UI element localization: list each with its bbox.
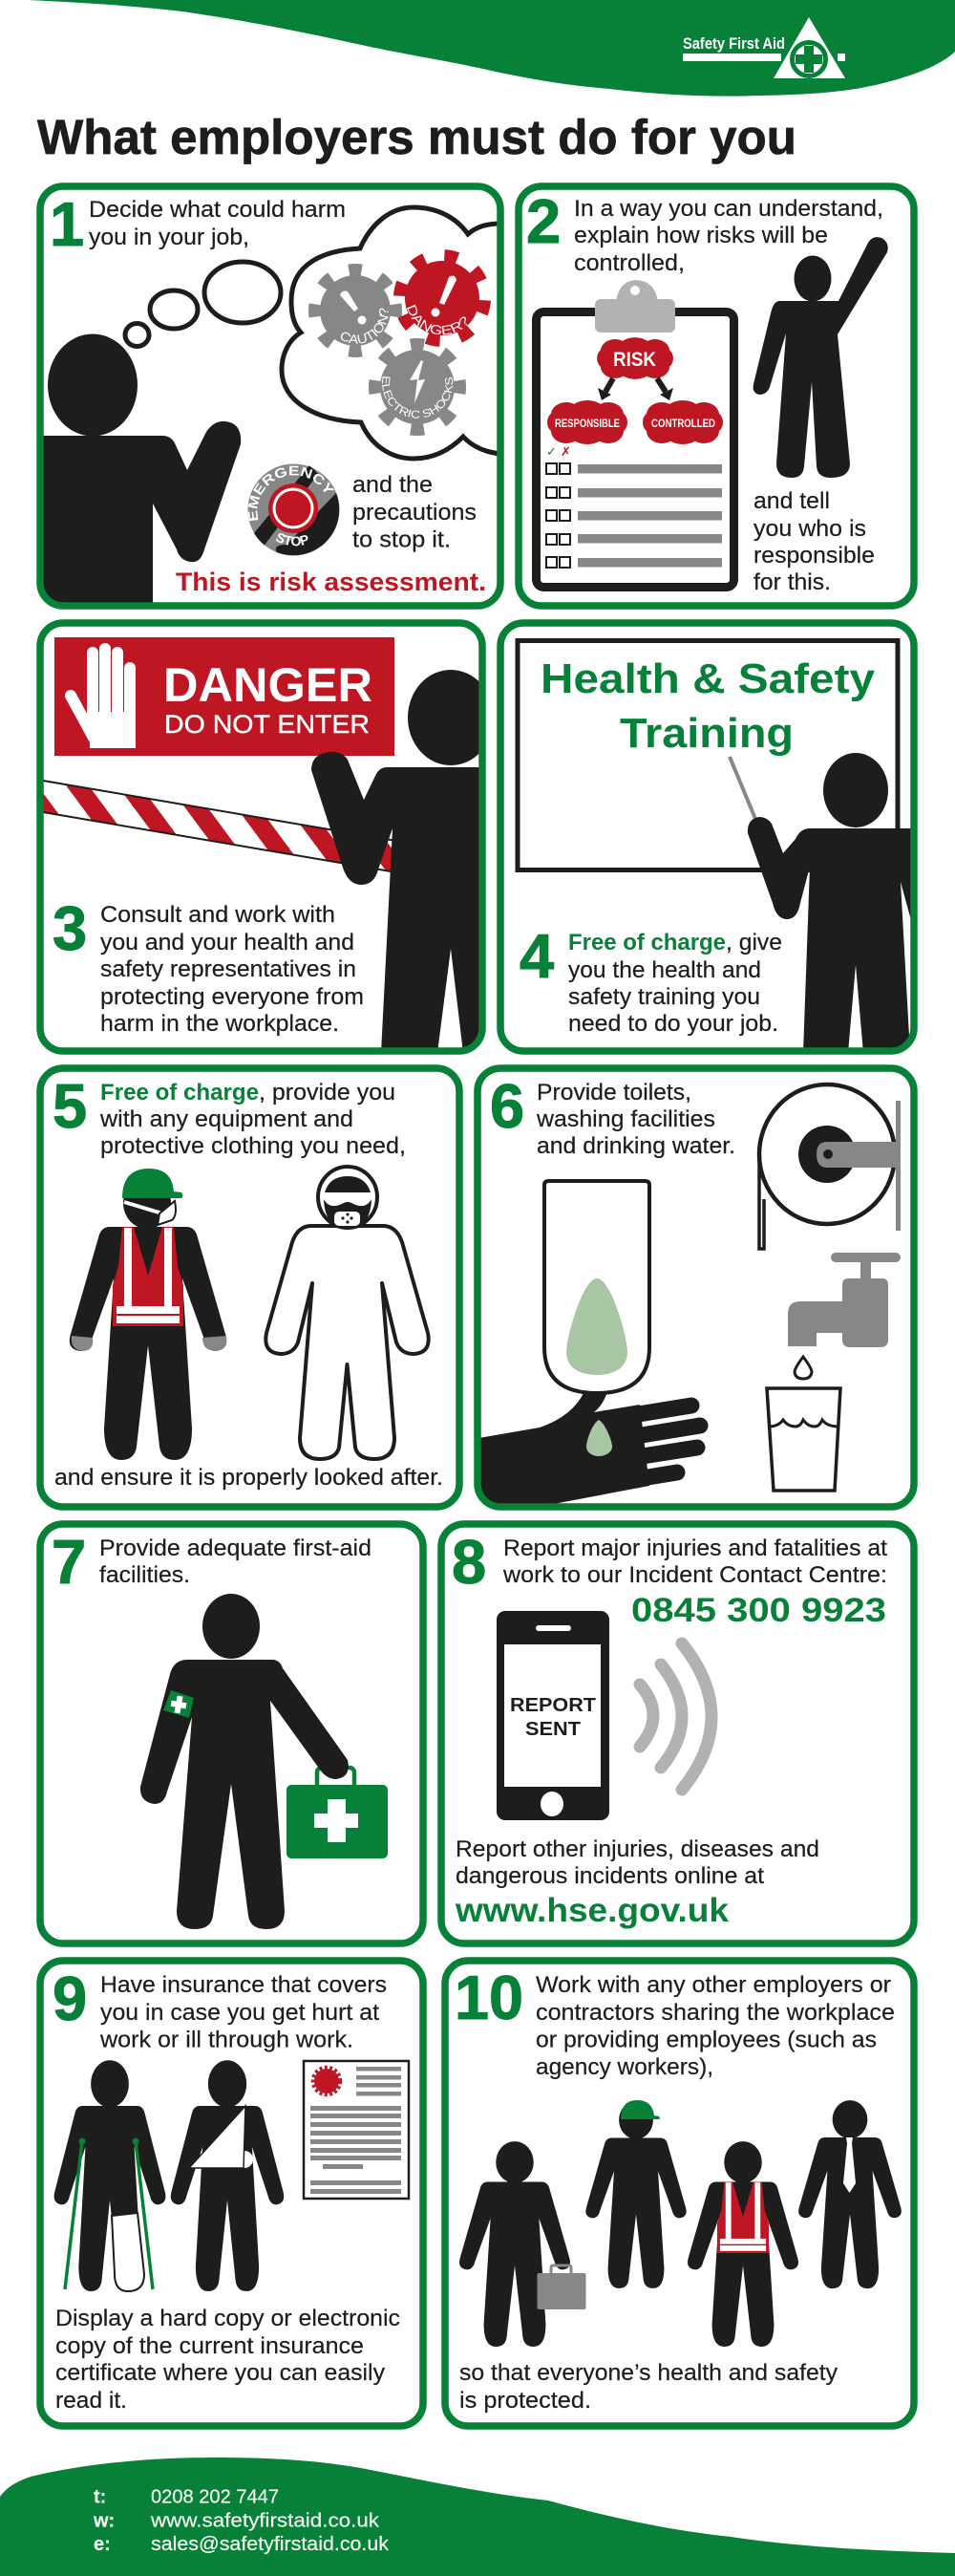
text: consult and work with: Consult and work with [100, 902, 335, 928]
text: provide adequate first-aid [99, 1535, 371, 1588]
footer contact details: w: [93, 2511, 115, 2532]
clipboard: ✗ [561, 445, 571, 460]
icon: toilet roll [759, 1084, 901, 1249]
icon: tap [788, 1253, 901, 1347]
figure: person on crutches [54, 2060, 165, 2291]
text: in a way you can understand: explain how risks will be [574, 223, 828, 248]
text: and ensure it is properly looked after: and ensure it is properly looked after. [54, 1465, 443, 1491]
danger sign: DANGER [163, 658, 372, 712]
figure: person with raised hand [311, 670, 494, 1053]
figure: person in protective suit [265, 1167, 429, 1459]
number 4: 4 [520, 921, 554, 991]
header: green wave band [29, 0, 955, 97]
text: have insurance: you in case you get hurt at [100, 2000, 379, 2026]
text: display a hard copy: copy of the current insurance [55, 2333, 364, 2359]
text: free of charge equipment: Free of charge [100, 1080, 259, 1106]
figure: person with hi-vis vest [688, 2141, 798, 2347]
text: and tell you who is responsible: for this. [753, 569, 831, 595]
panel 5: protective clothing [40, 1068, 459, 1507]
text: in a way you can understand: controlled, [574, 250, 685, 276]
text: and the precautions [352, 472, 477, 552]
text: and tell you who is responsible: you who is [753, 516, 866, 542]
text: consult and work with: protecting everyone from [100, 984, 364, 1010]
website: www.hse.gov.uk [455, 1892, 730, 1929]
armband [163, 1690, 194, 1718]
figure: person raising arm [753, 237, 888, 478]
thought bubbles [125, 262, 281, 346]
text: free of charge equipment [99, 1080, 406, 1159]
text: this is risk assessment: This is risk assessment. [176, 568, 486, 596]
text: and the precautions: to stop it. [352, 527, 451, 552]
text: so that everyone's health: so that everyone’s health and safety [459, 2360, 838, 2386]
icon: hand under soap dispenser [474, 1181, 700, 1510]
text: consult and work with [100, 902, 364, 1037]
number 5: 5 [53, 1071, 87, 1141]
gear: electric shocks [369, 338, 466, 436]
text: report major injuries: Report major injuries and fatalities at [503, 1535, 887, 1561]
icon: insurance certificate [304, 2061, 409, 2199]
footer contact details: sales@safetyfirstaid.co.uk [151, 2534, 390, 2555]
text: provide adequate first-aid: Provide adequate first-aid [99, 1535, 371, 1561]
thought cloud [282, 207, 502, 459]
number 6: 6 [490, 1071, 524, 1141]
text: in a way you can understand: In a way you can understand, [574, 196, 883, 222]
text: decide what could harm: Decide what could harm [89, 197, 346, 223]
text: report major injuries [502, 1535, 887, 1588]
text: free of charge training [568, 930, 782, 1037]
panel 1: risk assessment [36, 182, 504, 610]
number 10: 10 [455, 1963, 523, 2032]
panel 4: training [500, 623, 917, 1053]
text: provide adequate first-aid: facilities. [99, 1562, 190, 1588]
clipboard: ✓ [546, 445, 557, 460]
icon: signal waves [640, 1643, 711, 1790]
text: so that everyone's health [459, 2360, 838, 2414]
icon: phone: SENT [525, 1719, 581, 1740]
clipboard: RESPONSIBLE [555, 419, 620, 430]
icon: first aid kit [286, 1768, 388, 1858]
number 7: 7 [52, 1527, 86, 1597]
text: and the precautions: and the [352, 472, 433, 498]
danger sign [54, 637, 394, 756]
text: and tell you who is responsible [753, 488, 875, 595]
barrier tape [44, 780, 392, 872]
footer: green wave band [0, 2458, 955, 2576]
panel 7: first aid [40, 1524, 423, 1943]
clipboard [537, 280, 733, 587]
title: What employers must do for you [37, 110, 796, 164]
text: decide what could harm [89, 197, 346, 250]
logo: Safety First Aid [683, 17, 845, 78]
gear: electric shocks: ELECTRIC SHOCKS? [382, 376, 453, 419]
text: consult and work with: you and your health and [100, 930, 354, 955]
text: free of charge equipment: with any equipment and [99, 1106, 353, 1132]
training board: Health & Safety [541, 655, 876, 702]
text: free of charge training: you the health and [568, 957, 761, 983]
icon: water drop [795, 1357, 812, 1379]
icon: emergency stop button: EMERGENCY [248, 466, 334, 522]
training board [518, 640, 898, 869]
text: so that everyone's health: is protected. [459, 2388, 591, 2414]
panel 8: report injuries [441, 1524, 914, 1943]
text: and tell you who is responsible: responsible [753, 543, 875, 569]
text: consult and work with: harm in the workplace. [100, 1011, 339, 1037]
icon: emergency stop button [248, 464, 340, 556]
icon: emergency stop button: STOP [276, 533, 308, 547]
footer contact details: e: [94, 2534, 111, 2555]
panel 6: welfare facilities [474, 1068, 914, 1510]
text: display a hard copy: Display a hard copy or electronic [55, 2306, 400, 2331]
number 9: 9 [53, 1964, 87, 2033]
text: free of charge training: Free of charge [568, 930, 726, 955]
text: free of charge equipment: protective clothing you need, [100, 1133, 406, 1159]
text: display a hard copy: certificate where you can easily [55, 2360, 385, 2386]
icon: phone: REPORT [510, 1695, 596, 1716]
number 1: 1 [50, 189, 84, 259]
text: provide toilets: and drinking water. [537, 1133, 735, 1159]
text: have insurance: work or ill through work. [99, 2028, 353, 2052]
figure: worker in PPE [70, 1169, 226, 1460]
text: free of charge training: safety training you [568, 984, 760, 1010]
text: provide toilets [536, 1080, 735, 1159]
panel 10: working with others [445, 1961, 914, 2426]
text: report other injuries [456, 1836, 819, 1889]
text: work with any other employers: contractors sharing the workplace [536, 2000, 895, 2026]
text: work with any other employers: or providing employees (such as [536, 2028, 877, 2052]
text: display a hard copy [55, 2306, 400, 2414]
text: work with any other employers: agency workers), [536, 2054, 713, 2080]
text: have insurance: Have insurance that covers [100, 1972, 387, 1998]
training board: Training [620, 710, 794, 757]
text: have insurance [99, 1972, 387, 2052]
gear: danger: DANGER? [407, 304, 468, 334]
gear: caution: CAUTION? [340, 308, 389, 344]
text: report other injuries: Report other injuries, diseases and [456, 1836, 819, 1862]
figure: person with briefcase [459, 2141, 586, 2347]
pointer [730, 757, 755, 819]
figure: person with tie [798, 2100, 902, 2288]
figure: trainer [748, 753, 917, 1053]
text: report other injuries: dangerous incidents online at [456, 1863, 764, 1889]
footer contact details [93, 2486, 390, 2555]
text: provide toilets: washing facilities [536, 1106, 715, 1132]
text: free of charge training: , give [726, 930, 782, 955]
gear: caution [308, 264, 402, 357]
icon: glass of water [767, 1388, 840, 1491]
text: and tell you who is responsible: and tell [753, 488, 830, 514]
text: work with any other employers: Work with any other employers or [536, 1972, 891, 1998]
footer contact details: www.safetyfirstaid.co.uk [150, 2511, 380, 2532]
figure: first aider [140, 1594, 349, 1929]
panel 9: insurance [40, 1961, 423, 2426]
text: provide toilets: Provide toilets, [537, 1080, 691, 1106]
text: work with any other employers [536, 1972, 895, 2080]
figure: person with green cap [585, 2100, 687, 2288]
phone number: 0845 300 9923 [631, 1592, 886, 1629]
icon: phone [497, 1611, 609, 1820]
panel 3: consult [8, 623, 494, 1053]
figure: person with arm sling [171, 2060, 284, 2291]
text: free of charge equipment: , provide you [259, 1080, 395, 1106]
text: free of charge training: need to do your job. [568, 1011, 778, 1037]
text: consult and work with: safety representatives in [100, 956, 356, 982]
text: in a way you can understand [574, 196, 883, 276]
figure: thinking person [38, 334, 241, 612]
gear: danger [393, 249, 491, 347]
text: decide what could harm: you in your job, [89, 225, 249, 250]
clipboard: CONTROLLED [651, 419, 715, 430]
number 2: 2 [526, 186, 561, 256]
number 3: 3 [53, 893, 87, 963]
text: report major injuries: work to our Incident Contact Centre: [502, 1562, 887, 1588]
text: and the precautions: precautions [352, 500, 477, 526]
text: display a hard copy: read it. [55, 2388, 127, 2414]
footer contact details: t: [94, 2486, 106, 2507]
footer contact details: 0208 202 7447 [151, 2486, 279, 2507]
clipboard: RISK [613, 349, 656, 371]
logo: Safety First Aid: Safety First Aid [683, 34, 785, 53]
danger sign: DO NOT ENTER [164, 710, 370, 739]
panel 2: explain risks [519, 186, 914, 606]
number 8: 8 [452, 1527, 486, 1597]
